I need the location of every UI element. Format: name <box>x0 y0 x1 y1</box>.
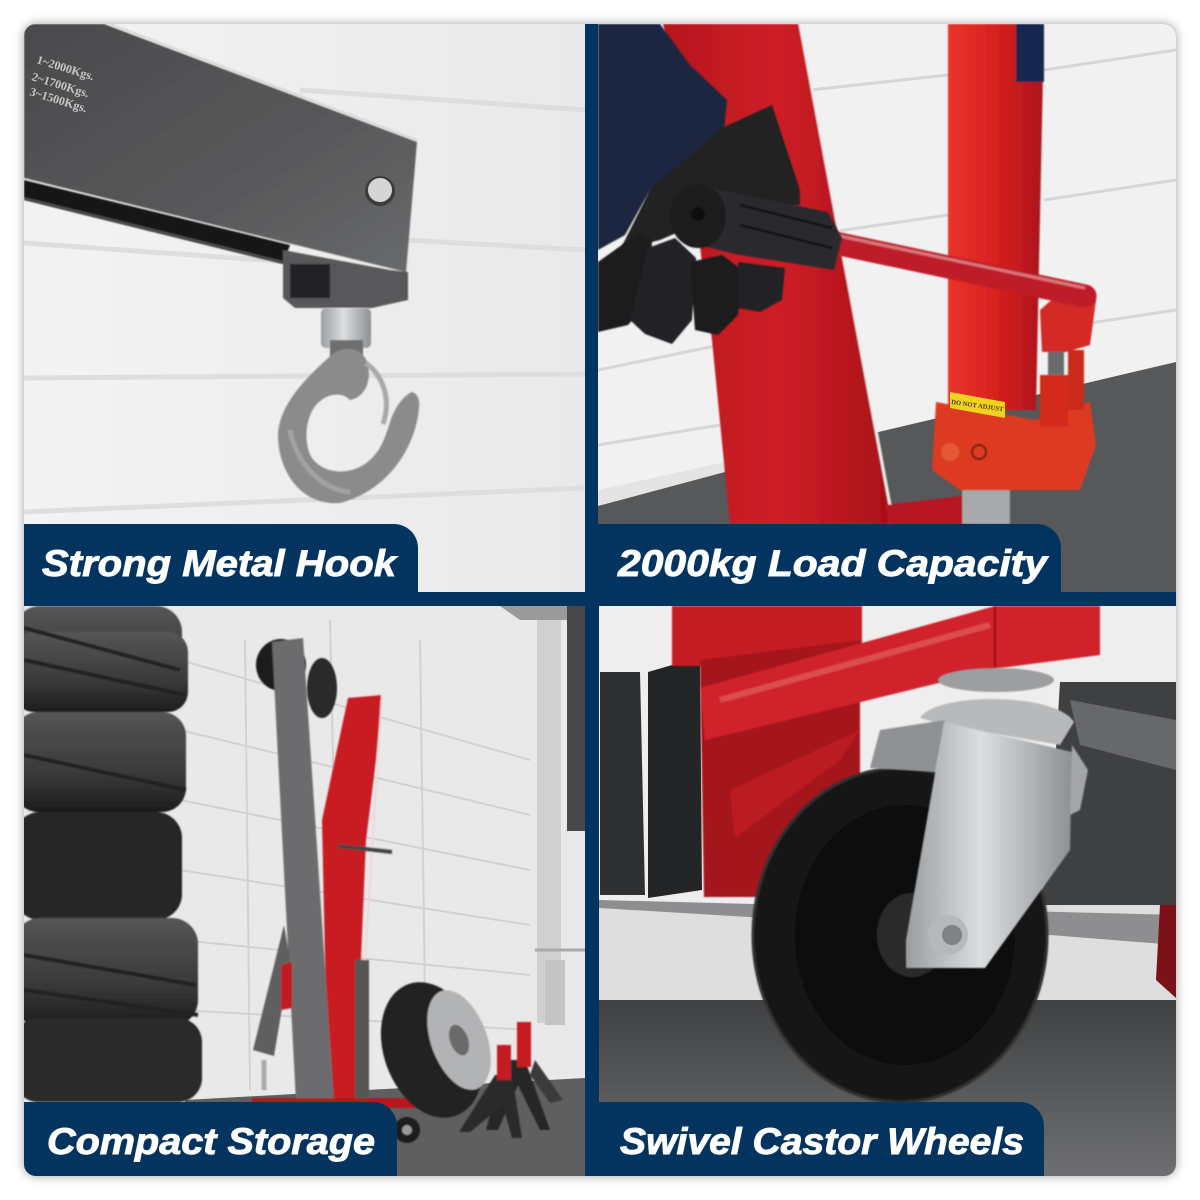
caption tab: 2000kg load capacity <box>598 524 1061 592</box>
jack stands <box>459 1022 563 1138</box>
castor wheel <box>753 768 1047 1102</box>
tyre stack <box>14 606 202 1102</box>
axle bolt <box>942 915 968 955</box>
hydraulic pump base <box>932 282 1096 490</box>
arm capacity text: 2~1700Kgs. <box>30 69 91 100</box>
caption tab: swivel castor wheels <box>599 1102 1044 1176</box>
panel: compact storage <box>14 606 585 1176</box>
red crane leg <box>663 24 970 524</box>
panel: swivel castor wheels <box>599 606 1176 1176</box>
rubber bumpers <box>600 657 702 898</box>
spare wheel <box>380 981 492 1119</box>
panel: 2000kg load capacity <box>598 24 1176 592</box>
caption tab: compact storage <box>24 1102 397 1176</box>
pump handle rod <box>835 235 1085 296</box>
arm capacity text: 1~2000Kgs. <box>35 52 96 83</box>
photo: background and floor <box>599 606 1176 1176</box>
arm capacity text: 3~1500Kgs. <box>28 84 89 115</box>
warning label <box>950 392 1005 418</box>
hook <box>278 308 419 503</box>
crane arm <box>24 24 417 308</box>
photo: wall and floor <box>598 24 1176 592</box>
caption tab: swivel castor wheels: Swivel Castor Wheels <box>620 1121 1024 1162</box>
photo: garage wall and floor <box>24 606 585 1176</box>
panel: strong metal hook <box>24 24 585 592</box>
caption tab: 2000kg load capacity: 2000kg Load Capacity <box>617 543 1050 584</box>
glove fingers <box>598 232 785 344</box>
rubber grip <box>670 184 842 270</box>
photo: white brick wall <box>24 24 585 592</box>
swivel fork <box>870 668 1088 968</box>
caption tab: strong metal hook: Strong Metal Hook <box>42 543 399 584</box>
gloved hand back <box>598 24 800 250</box>
wall pipes and box <box>500 606 585 1025</box>
warning label: DO NOT ADJUST <box>951 399 1004 413</box>
caption tab: compact storage: Compact Storage <box>47 1121 375 1162</box>
red crane base <box>672 606 1100 897</box>
icon: arm bolt <box>365 176 395 206</box>
hydraulic column <box>948 24 1044 524</box>
folded crane <box>252 638 420 1143</box>
caption tab: strong metal hook <box>24 524 418 592</box>
arm capacity text <box>30 56 92 112</box>
